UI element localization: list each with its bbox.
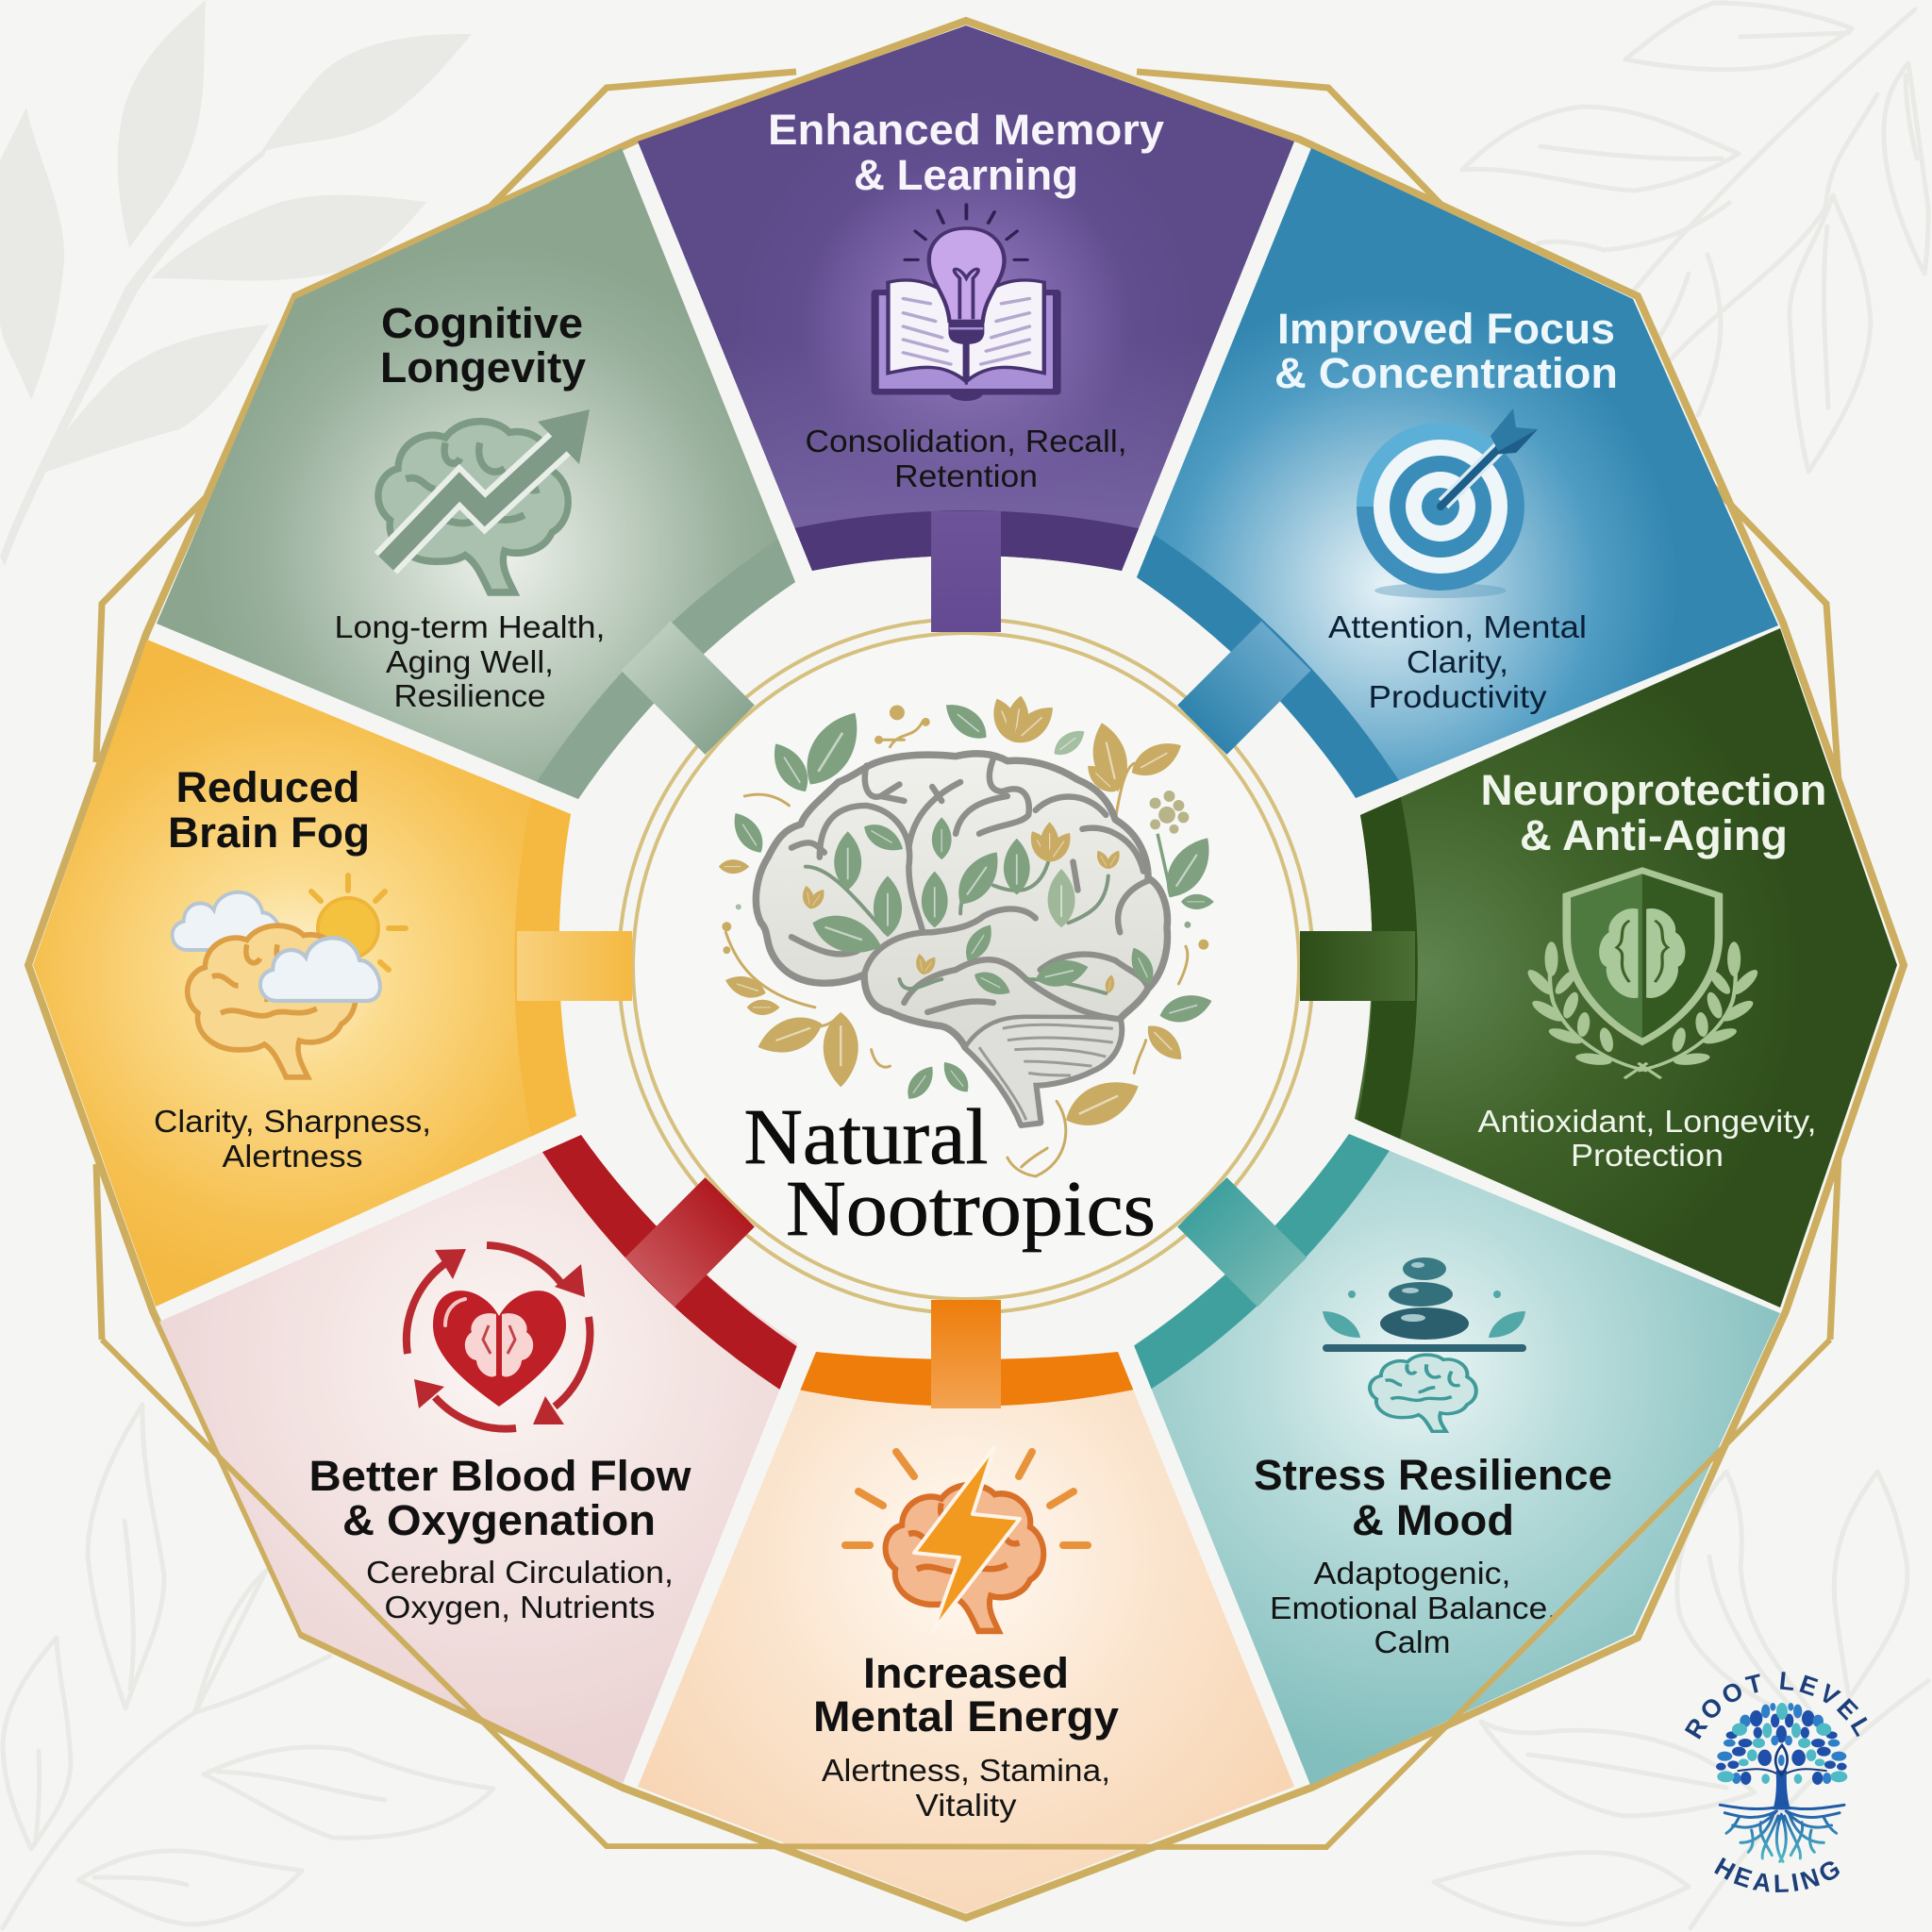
title: [743, 1093, 1156, 1253]
heading: [1254, 1451, 1612, 1544]
description: Clarity,: [1407, 644, 1508, 679]
logo lettering: HEALING: [1714, 1857, 1840, 1892]
description: Resilience: [394, 678, 545, 713]
connector: [1300, 931, 1415, 1001]
heading: & Learning: [854, 151, 1078, 199]
heading: [1274, 305, 1618, 397]
heading: & Mood: [1352, 1496, 1514, 1544]
description: [154, 1104, 431, 1174]
description: Alertness: [223, 1139, 362, 1174]
background leaves: top right: [1462, 3, 1928, 472]
icon: brain with clouds and sun: [173, 875, 406, 1077]
heading: Increased: [863, 1649, 1069, 1697]
panel: Better Blood Flow & Oxygenation: [159, 1135, 798, 1784]
heading: [168, 763, 370, 857]
panel: Enhanced Memory & Learning: [638, 25, 1294, 632]
connector: [1177, 621, 1311, 755]
logo: Root Level Healing: [1685, 1672, 1868, 1892]
panel: Reduced Brain Fog: [33, 640, 632, 1307]
panel: Stress Resilience & Mood: [1134, 1134, 1780, 1785]
description: [366, 1555, 674, 1624]
panel: Neuroprotection & Anti-Aging: [1300, 628, 1897, 1307]
heading: & Anti-Aging: [1520, 811, 1788, 859]
icon: book and light bulb: [872, 205, 1061, 401]
panel: Cognitive Longevity: [157, 148, 795, 799]
heading: [1481, 766, 1826, 859]
description: Cerebral Circulation,: [366, 1555, 674, 1590]
connector: [931, 1300, 1001, 1408]
heading: Reduced: [175, 763, 360, 811]
icon: brain with rising arrow: [378, 409, 590, 592]
description: Productivity: [1368, 679, 1547, 714]
connector: [625, 1177, 755, 1307]
heading: Improved Focus: [1277, 305, 1615, 353]
description: Consolidation, Recall,: [806, 424, 1126, 458]
logo lettering: [1685, 1672, 1868, 1892]
heading: Neuroprotection: [1481, 766, 1826, 814]
heading: [813, 1649, 1119, 1740]
logo lettering: ROOT LEVEL: [1685, 1672, 1868, 1740]
description: [334, 609, 606, 713]
heading: Stress Resilience: [1254, 1451, 1612, 1499]
description: Attention, Mental: [1328, 609, 1587, 644]
description: [1328, 609, 1587, 714]
gold outline, rear polygon: [96, 72, 1839, 1340]
description: [1270, 1556, 1557, 1659]
background leaves: bottom right: [1434, 1472, 1928, 1928]
heading: Longevity: [380, 343, 586, 391]
description: Oxygen, Nutrients: [385, 1590, 655, 1624]
description: Adaptogenic,: [1313, 1556, 1511, 1591]
description: Emotional Balance,: [1270, 1591, 1557, 1625]
description: Clarity, Sharpness,: [154, 1104, 431, 1139]
description: Calm: [1374, 1624, 1451, 1659]
panel: Increased Mental Energy: [638, 1300, 1294, 1913]
icon: brain with lightning bolt: [845, 1447, 1088, 1631]
description: Retention: [894, 458, 1038, 493]
panel: Improved Focus & Concentration: [1137, 148, 1778, 798]
heading: & Concentration: [1274, 349, 1618, 397]
heading: [768, 106, 1164, 199]
background leaves: top left: [0, 0, 472, 566]
gold outline, front polygon crossing lower panels: [102, 1340, 1830, 1847]
description: Antioxidant, Longevity,: [1477, 1104, 1817, 1139]
heading: Better Blood Flow: [309, 1452, 692, 1500]
heading: [380, 299, 586, 391]
brain with botanical growth: [719, 694, 1222, 1176]
heading: Mental Energy: [813, 1692, 1119, 1740]
description: Long-term Health,: [334, 609, 606, 644]
heading: Cognitive: [381, 299, 583, 347]
connector: [517, 931, 632, 1001]
description: Aging Well,: [386, 644, 554, 679]
heading: Brain Fog: [168, 808, 370, 857]
connector: [931, 511, 1001, 632]
central hub: [619, 619, 1313, 1313]
icon: target with arrow: [1357, 408, 1538, 598]
description: [822, 1753, 1110, 1823]
icon: shield with brain and laurel: [1524, 871, 1762, 1078]
title: Nootropics: [786, 1165, 1156, 1253]
icon: heart with brain and circulation arrows: [407, 1245, 590, 1429]
description: [1477, 1104, 1817, 1173]
description: [806, 424, 1126, 493]
description: Protection: [1571, 1138, 1724, 1173]
background leaves: bottom left: [3, 1405, 493, 1928]
description: Vitality: [915, 1788, 1017, 1823]
heading: [309, 1452, 692, 1544]
title: Natural: [743, 1093, 989, 1181]
heading: & Oxygenation: [342, 1496, 656, 1544]
icon: balanced stones over brain: [1323, 1257, 1526, 1431]
connector: [1177, 1177, 1307, 1307]
description: Alertness, Stamina,: [822, 1753, 1110, 1788]
connector: [621, 621, 755, 755]
heading: Enhanced Memory: [768, 106, 1164, 154]
logo tree: [1716, 1703, 1847, 1861]
